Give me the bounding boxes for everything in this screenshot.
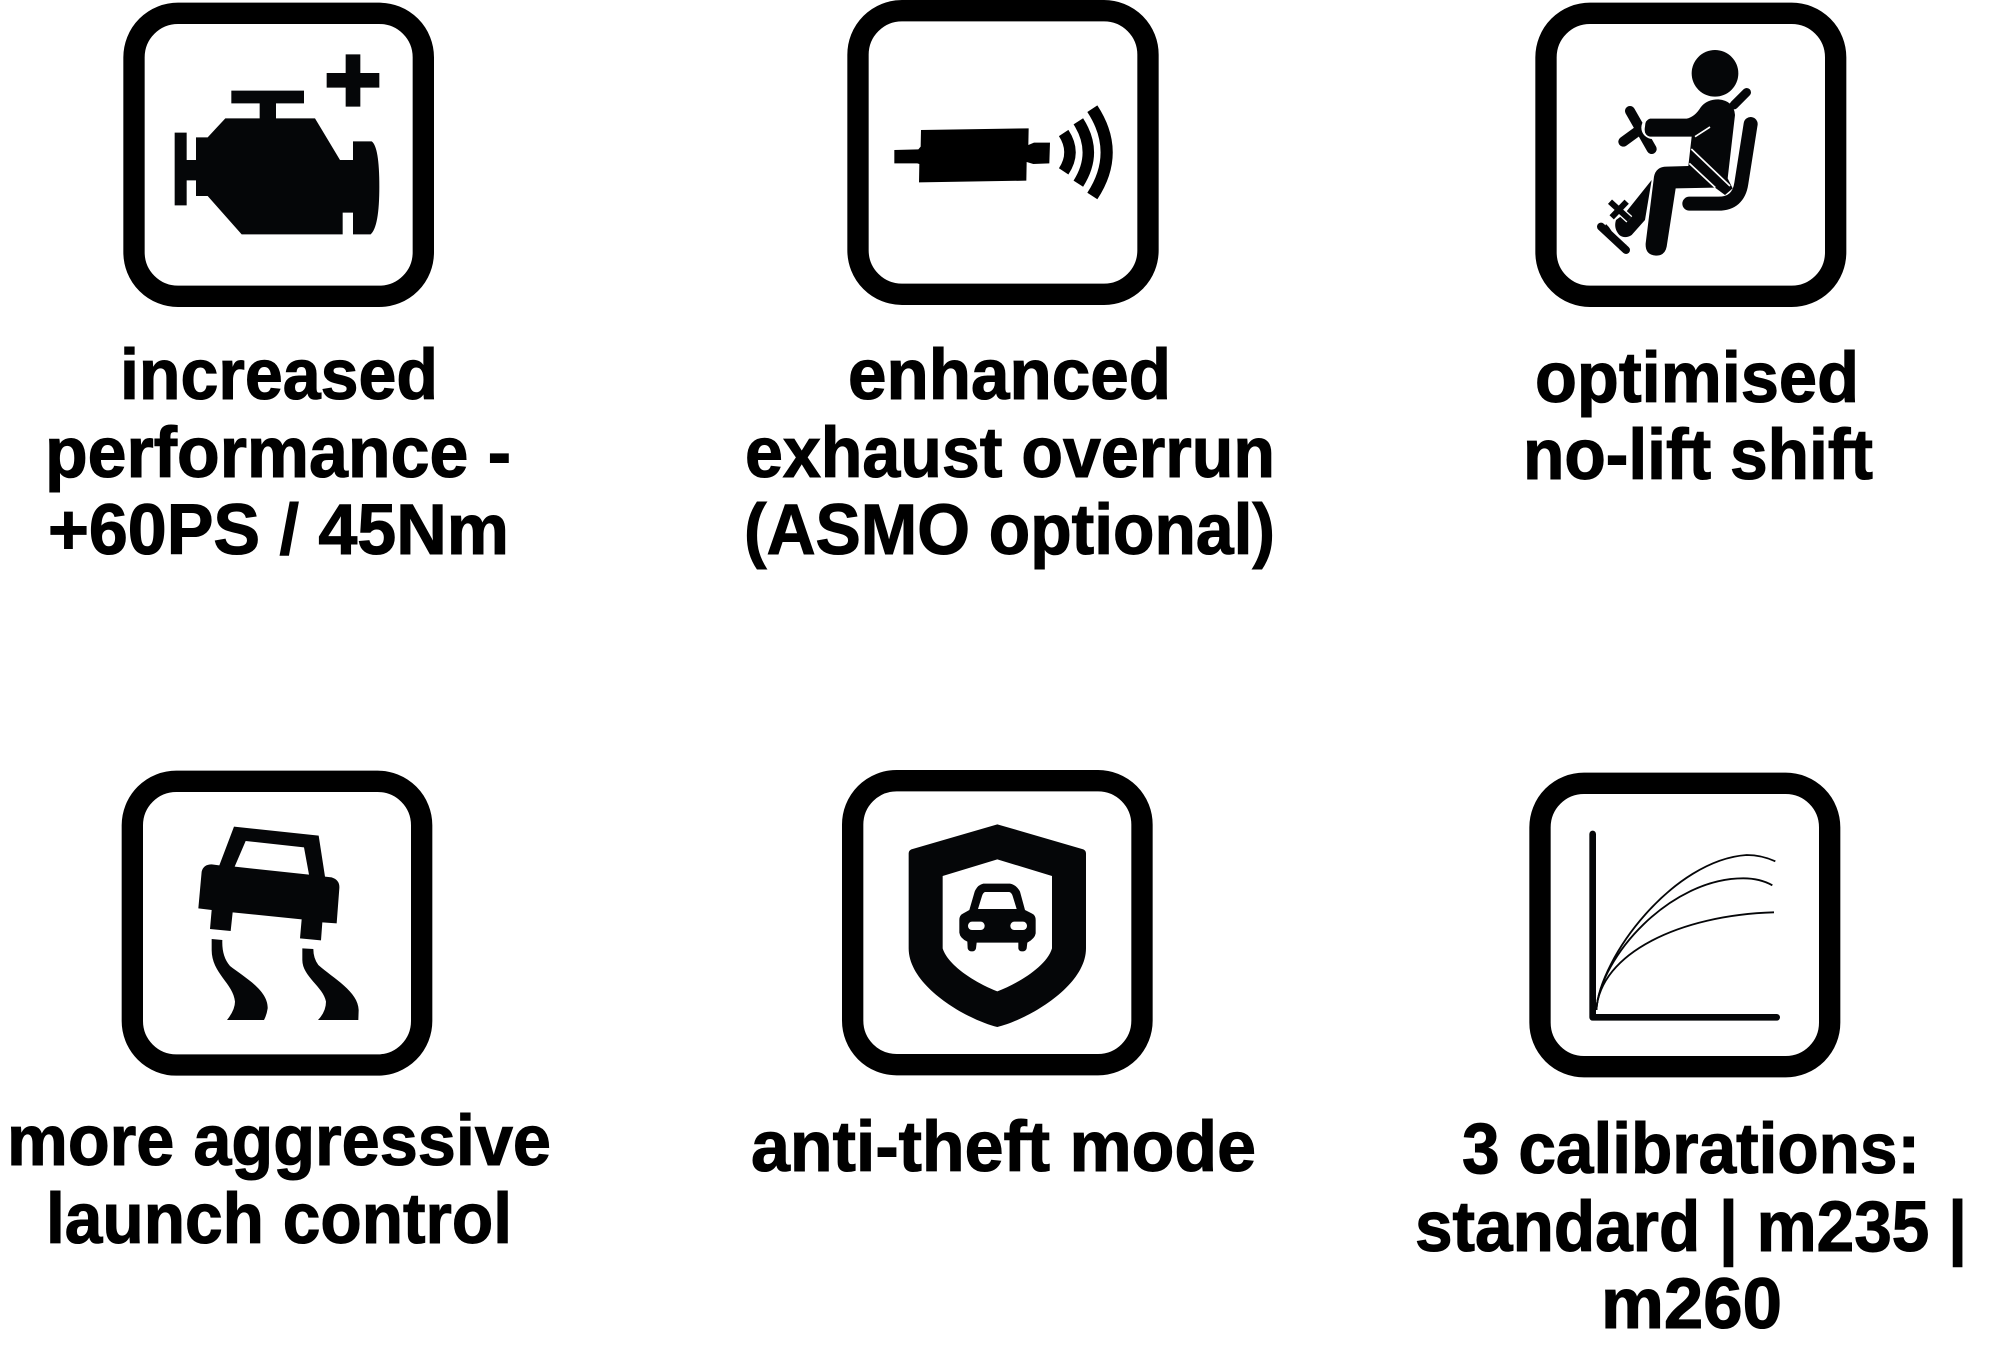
label: 3 calibrations: 3 calibrations: bbox=[1462, 1110, 1920, 1189]
panel: launch control bbox=[7, 781, 551, 1259]
label: increased performance bbox=[45, 336, 511, 570]
icon: engine with plus bbox=[134, 13, 423, 296]
panel: optimised no-lift shift bbox=[1523, 13, 1873, 495]
panel: anti-theft mode bbox=[751, 781, 1256, 1187]
label: enhanced exhaust overrun: enhanced bbox=[848, 336, 1171, 415]
label: increased performance: performance - bbox=[45, 414, 511, 493]
label: more aggressive launch control: launch control bbox=[46, 1180, 512, 1259]
label: optimised no-lift shift: no-lift shift bbox=[1523, 416, 1873, 495]
icon: exhaust with sound waves bbox=[858, 11, 1148, 294]
icon: seated driver with belt bbox=[1546, 13, 1836, 296]
icon: shield with car bbox=[853, 781, 1142, 1065]
icon: skidding car bbox=[132, 781, 422, 1065]
label: more aggressive launch control bbox=[7, 1102, 551, 1259]
label: 3 calibrations bbox=[1415, 1110, 1967, 1344]
label: enhanced exhaust overrun: exhaust overrun bbox=[745, 414, 1275, 493]
icon: power curve chart bbox=[1540, 783, 1830, 1067]
label: 3 calibrations: standard | m235 | bbox=[1415, 1188, 1967, 1267]
label: optimised no-lift shift: optimised bbox=[1535, 339, 1859, 418]
label: increased performance: +60PS / 45Nm bbox=[48, 491, 509, 570]
label: increased performance: increased bbox=[120, 336, 438, 415]
label: anti-theft mode: anti-theft mode bbox=[751, 1108, 1256, 1187]
label: more aggressive launch control: more aggressive bbox=[7, 1102, 551, 1181]
label: enhanced exhaust overrun: (ASMO optional) bbox=[744, 491, 1275, 570]
panel: three calibrations bbox=[1415, 783, 1967, 1344]
panel: increased performance bbox=[45, 13, 511, 570]
label: enhanced exhaust overrun bbox=[744, 336, 1275, 570]
label: optimised no-lift shift bbox=[1523, 339, 1873, 495]
label: 3 calibrations: m260 bbox=[1601, 1265, 1782, 1344]
panel: enhanced exhaust overrun bbox=[744, 11, 1275, 570]
